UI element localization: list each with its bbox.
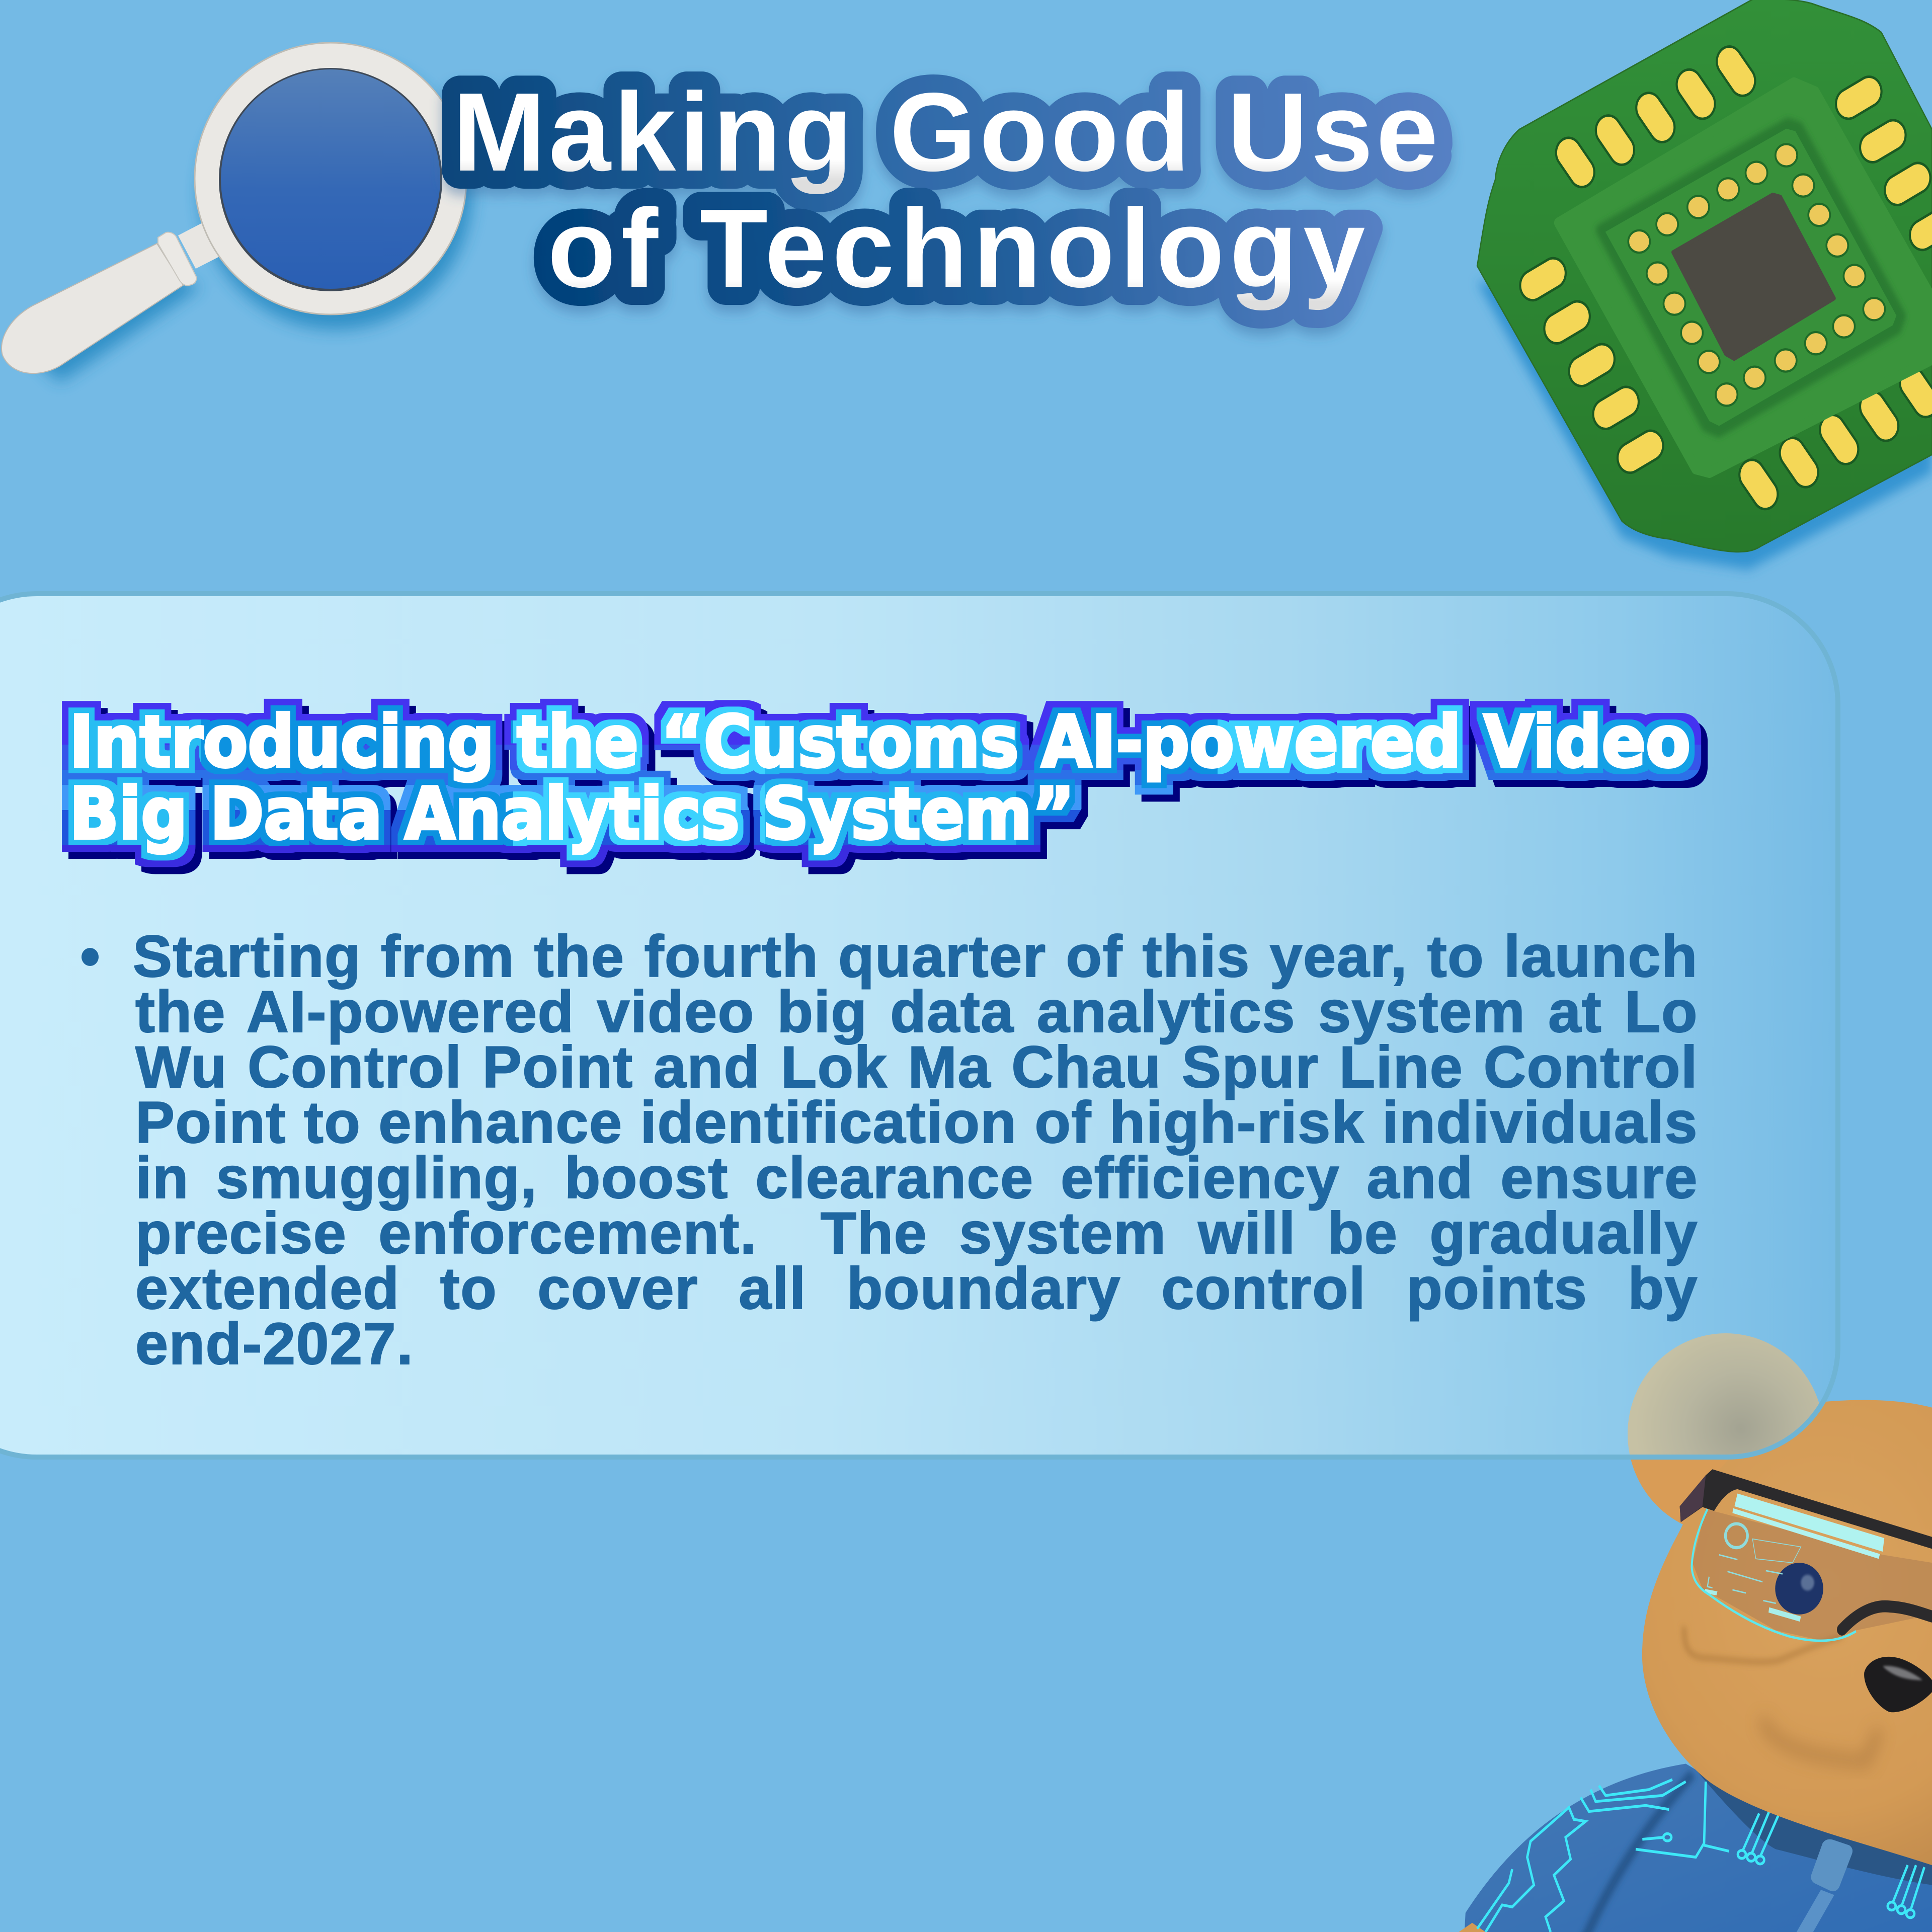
bullet marker bbox=[82, 948, 99, 966]
title bbox=[453, 70, 1441, 311]
neck shadow bbox=[1696, 1769, 1932, 1885]
glasses frame bbox=[1680, 1469, 1932, 1549]
title: of Technology bbox=[547, 186, 1371, 311]
body text: Wu Control Point and Lok Ma Chau Spur Line Control bbox=[135, 1033, 1698, 1100]
frosted bear ear behind panel bbox=[1628, 1333, 1819, 1455]
subheading: Big Data Analytics System” bbox=[69, 773, 1075, 855]
nose bbox=[1864, 1657, 1932, 1712]
subheading bbox=[69, 701, 1691, 855]
content panel bbox=[0, 594, 1838, 1535]
title: Making Good Use bbox=[453, 70, 1441, 195]
circuit traces bbox=[1477, 1780, 1924, 1932]
head bbox=[1642, 1400, 1932, 1865]
bottom pads bbox=[1752, 383, 1925, 494]
body text: extended to cover all boundary control points by bbox=[135, 1255, 1698, 1321]
magnifying glass icon bbox=[2, 43, 472, 382]
body text: Starting from the fourth quarter of this year, to launch bbox=[133, 923, 1698, 989]
muzzle creases bbox=[1684, 1627, 1842, 1662]
body text: Point to enhance identification of high-risk individuals bbox=[135, 1089, 1698, 1155]
left and right pads bbox=[1533, 92, 1932, 458]
body text: the AI-powered video big data analytics system at Lo bbox=[135, 978, 1698, 1044]
die bbox=[1673, 195, 1834, 359]
collar and zipper bbox=[1811, 1839, 1853, 1891]
body text: in smuggling, boost clearance efficiency and ensure bbox=[135, 1144, 1698, 1211]
body text: end-2027. bbox=[135, 1310, 414, 1377]
solder dots bbox=[1628, 144, 1885, 406]
bear mascot bbox=[1459, 1333, 1932, 1932]
lens outline bbox=[1692, 1509, 1856, 1641]
hand sliver bbox=[1459, 1923, 1486, 1932]
eye bbox=[1775, 1563, 1823, 1615]
lower frame bbox=[1842, 1606, 1932, 1630]
raised ridge bbox=[1559, 83, 1932, 472]
top pads bbox=[1569, 61, 1743, 172]
HUD bars bbox=[1734, 1494, 1884, 1552]
jacket bbox=[1464, 1763, 1932, 1932]
body text: precise enforcement. The system will be gradually bbox=[135, 1199, 1698, 1266]
body text bbox=[133, 923, 1698, 1377]
subheading: Introducing the “Customs AI-powered Video bbox=[69, 701, 1691, 783]
chip icon bbox=[1477, 0, 1932, 570]
lens tint bbox=[1693, 1509, 1932, 1642]
jacket fold bbox=[1582, 1774, 1693, 1932]
bear ear bbox=[1628, 1333, 1824, 1535]
